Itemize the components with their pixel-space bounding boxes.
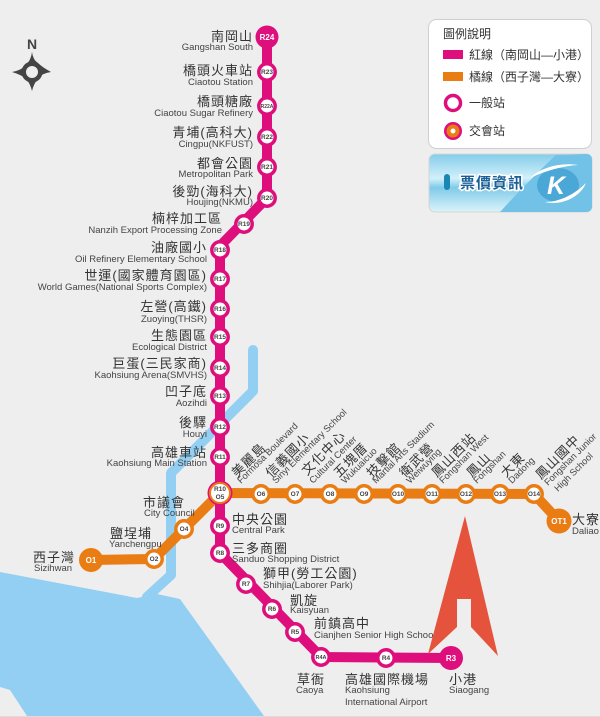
icon: compass <box>12 36 51 91</box>
station labels: rotated east orange section: 信義國小 <box>263 430 313 480</box>
panel: legend: 圖例說明 <box>443 27 491 41</box>
red line stations: R8 <box>216 550 225 557</box>
arrow: red north arrow <box>428 516 498 656</box>
station labels: right-aligned north section: Houjing(NKMU) <box>186 197 253 208</box>
red line stations: R24 <box>260 33 275 42</box>
station labels: right-aligned north section: 高雄車站 <box>151 445 207 460</box>
red line stations: R12 <box>214 424 226 431</box>
orange line stations: O8 <box>326 491 335 498</box>
station labels: rotated east orange section: Cultural Center <box>307 434 359 485</box>
station labels: south red section: 三多商圈 <box>232 541 288 556</box>
station labels: right-aligned north section: 巨蛋(三民家商) <box>112 356 207 371</box>
red line stations: R7 <box>242 581 251 588</box>
station labels: right-aligned north section: Aozihdi <box>176 398 207 409</box>
orange line stations: O14 <box>528 491 541 498</box>
station labels: south red section: 高雄國際機場 <box>345 672 429 687</box>
station labels: south red section: 小港 <box>449 672 477 687</box>
station labels: rotated east orange section: 鳳山 <box>464 450 494 480</box>
station labels: rotated east orange section: Martial Arts Stadium <box>370 419 436 485</box>
red line stations <box>212 26 463 670</box>
station labels: rotated east orange section: 大東 <box>498 450 528 480</box>
orange line stations: O11 <box>426 491 438 498</box>
station labels: west orange section: Yanchengpu <box>109 539 162 550</box>
panel: legend <box>428 20 592 148</box>
red line stations: R16 <box>214 306 226 313</box>
station labels: rotated east orange section: 美麗島 <box>229 440 269 480</box>
orange line <box>91 493 559 560</box>
panel: ticket info banner: 票價資訊 <box>460 174 524 192</box>
station labels: south red section: 獅甲(勞工公園) <box>263 566 358 581</box>
orange line stations: O4 <box>180 526 189 533</box>
station labels: south red section: Central Park <box>232 525 285 536</box>
station labels: south red section: Caoya <box>296 685 324 696</box>
station labels: south red section <box>232 512 600 708</box>
station labels: right-aligned north section: 楠梓加工區 <box>152 211 222 226</box>
orange line stations <box>79 486 572 572</box>
red line stations: R5 <box>291 629 300 636</box>
station labels: right-aligned north section: Metropolitan Park <box>179 169 253 180</box>
station labels: rotated east orange section: Wukuaicuo <box>339 446 379 485</box>
red line stations: R18 <box>214 247 226 254</box>
station labels: rotated east orange section: Weiwuying <box>404 447 443 485</box>
orange line stations: O7 <box>291 491 300 498</box>
station labels: right-aligned north section: 橋頭糖廠 <box>197 94 253 109</box>
station labels: right-aligned north section: 橋頭火車站 <box>183 63 253 78</box>
station labels: south red section: 草衙 <box>297 672 325 687</box>
station labels: rotated east orange section: High School <box>552 451 595 493</box>
station labels: right-aligned north section: Ecological District <box>132 342 207 353</box>
orange line stations: O6 <box>257 491 266 498</box>
station labels: south red section: International Airport <box>345 697 428 708</box>
station labels: south red section: Siaogang <box>449 685 489 696</box>
red line stations: R13 <box>214 393 226 400</box>
station labels: rotated east orange section: Fongshan <box>471 449 508 485</box>
station labels: rotated east orange section: 技擊館 <box>364 440 404 480</box>
station labels: rotated east orange section: 鳳山西站 <box>429 430 479 480</box>
station labels: west orange section: 西子灣 <box>33 550 75 565</box>
panel: legend: 橘線（西子灣—大寮） <box>469 69 589 84</box>
red line stations: R22 <box>261 134 273 141</box>
station labels: west orange section: Sizihwan <box>34 563 72 574</box>
station labels: south red section: Kaohsiung <box>345 685 390 696</box>
station labels: rotated east orange section: 衛武營 <box>397 440 437 480</box>
station labels: rotated east orange section: 鳳山國中 <box>533 432 583 482</box>
station labels: right-aligned north section: Gangshan South <box>182 42 253 53</box>
station labels: right-aligned north section: Ciaotou Station <box>188 77 253 88</box>
water: river and harbour <box>0 350 600 717</box>
panel: legend: 交會站 <box>469 123 505 138</box>
red line stations: R4 <box>382 655 391 662</box>
red line stations: R9 <box>216 523 225 530</box>
orange line stations: O13 <box>494 491 507 498</box>
station labels: right-aligned north section: 後勁(海科大) <box>172 184 253 199</box>
red line <box>220 37 451 658</box>
interchange station R10/O5: R10 <box>214 486 226 493</box>
red line stations: R4A <box>315 655 327 661</box>
station labels: west orange section <box>33 495 195 574</box>
station labels: right-aligned north section: 世運(國家體育園區) <box>84 268 207 283</box>
station labels: rotated east orange section: 五塊厝 <box>331 440 371 480</box>
station labels: rotated east orange section: Fongshan Junior <box>542 431 598 487</box>
station labels: rotated east orange section: Formosa Boulevard <box>235 421 300 485</box>
station labels: rotated east orange section: Fongshan West <box>437 432 491 485</box>
station labels: south red section: 中央公園 <box>232 512 288 527</box>
station labels: south red section: Sanduo Shopping District <box>232 554 340 565</box>
station labels: rotated east orange section: Dadong <box>506 455 536 485</box>
orange line stations: O12 <box>460 491 473 498</box>
station labels: right-aligned north section: Zuoying(THSR) <box>141 314 207 325</box>
icon: compass: N <box>27 36 37 52</box>
panel: ticket info banner <box>429 154 592 212</box>
station labels: south red section: Kaisyuan <box>290 605 329 616</box>
station labels: right-aligned north section: Ciaotou Sugar Refinery <box>154 108 253 119</box>
station labels: south red section: Cianjhen Senior High School <box>314 630 435 641</box>
station labels: right-aligned north section: Houyi <box>183 429 207 440</box>
station labels: right-aligned north section <box>38 29 253 469</box>
panel: ticket info banner: K <box>547 172 567 200</box>
station labels: south red section: Shihjia(Laborer Park) <box>263 580 353 591</box>
orange line stations: O10 <box>392 491 405 498</box>
station labels: west orange section: 市議會 <box>143 495 185 510</box>
station labels: south red section: 前鎮高中 <box>314 616 370 631</box>
station labels: right-aligned north section: 後驛 <box>179 415 207 430</box>
station labels: right-aligned north section: Oil Refinery Elementary School <box>75 254 207 265</box>
station labels: right-aligned north section: 左營(高鐵) <box>140 299 207 314</box>
station labels: west orange section: 鹽埕埔 <box>110 526 152 541</box>
station labels: west orange section: City Council <box>144 508 195 519</box>
station labels: right-aligned north section: 都會公園 <box>197 156 253 171</box>
orange line stations: O9 <box>360 491 369 498</box>
orange line stations: O2 <box>150 556 159 563</box>
station labels: south red section: Daliao <box>572 526 599 537</box>
red line stations: R15 <box>214 334 226 341</box>
orange line stations: OT1 <box>551 517 567 526</box>
station labels: right-aligned north section: Cingpu(NKFUST) <box>179 139 253 150</box>
station labels: south red section: 大寮 <box>572 512 600 527</box>
interchange station R10/O5 <box>208 480 232 506</box>
red line stations: R3 <box>446 654 457 663</box>
station labels: right-aligned north section: 凹子底 <box>165 384 207 399</box>
red line stations: R11 <box>214 454 226 461</box>
station labels: right-aligned north section: Kaohsiung Main Station <box>107 458 207 469</box>
station labels: right-aligned north section: Kaohsiung Arena(SMVHS) <box>95 370 207 381</box>
red line stations: R19 <box>238 221 250 228</box>
red line stations: R21 <box>261 164 273 171</box>
panel: legend: 紅線（南岡山—小港） <box>469 47 589 62</box>
red line stations: R22A <box>261 104 274 110</box>
station labels: right-aligned north section: 油廠國小 <box>151 240 207 255</box>
station labels: right-aligned north section: World Games(National Sports Complex) <box>38 282 207 293</box>
red line stations: R17 <box>214 276 226 283</box>
station labels: right-aligned north section: 南岡山 <box>211 29 253 44</box>
station labels: right-aligned north section: Nanzih Export Processing Zone <box>88 225 222 236</box>
station labels: rotated east orange section: Sinyi Elementary School <box>270 407 349 485</box>
station labels: rotated east orange section <box>229 407 598 493</box>
red line stations: R6 <box>268 606 277 613</box>
red line stations: R20 <box>261 195 273 202</box>
red line stations: R23 <box>261 69 273 76</box>
station labels: south red section: 凱旋 <box>290 593 318 608</box>
station labels: right-aligned north section: 青埔(高科大) <box>172 125 253 140</box>
station labels: rotated east orange section: 文化中心 <box>299 428 349 478</box>
orange line stations: O1 <box>86 556 97 565</box>
panel: legend: 一般站 <box>469 95 505 110</box>
red line stations: R14 <box>214 365 226 372</box>
interchange station R10/O5: O5 <box>216 494 225 501</box>
station labels: right-aligned north section: 生態園區 <box>151 328 207 343</box>
